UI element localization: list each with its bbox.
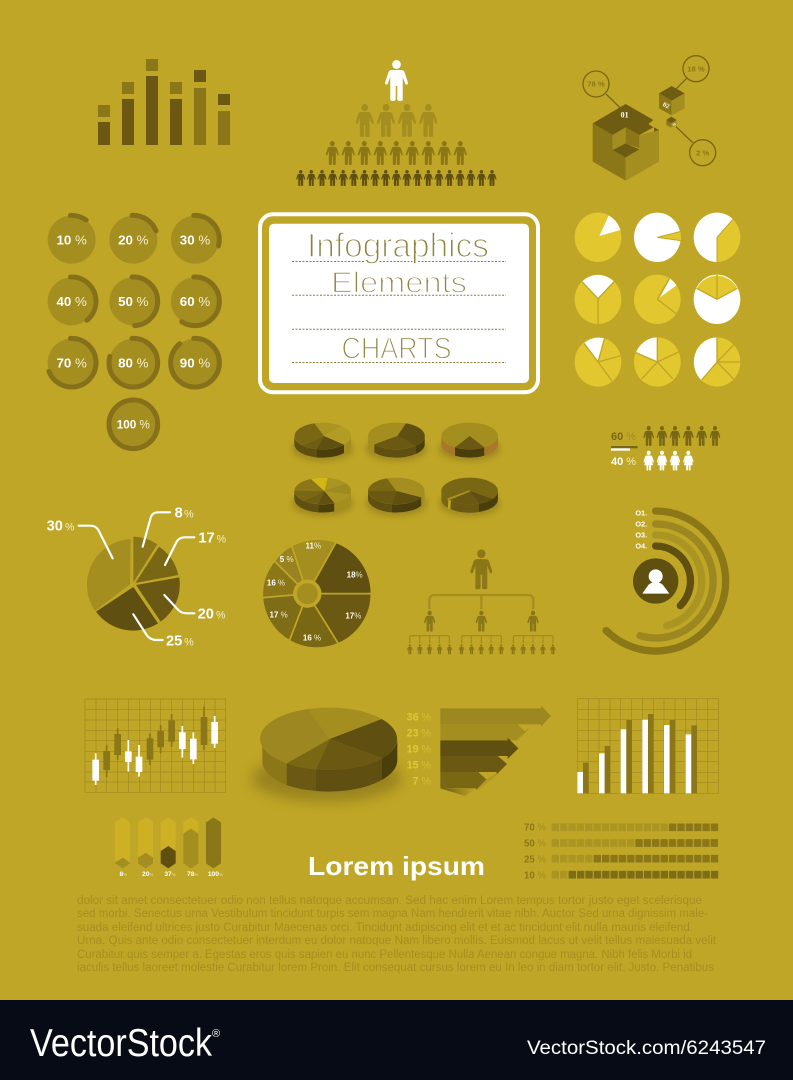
- footer bar: VectorStock.com/6243547: [527, 1037, 766, 1059]
- 3D pie 5: [366, 478, 427, 516]
- radial bar chart: O3.: [635, 531, 647, 540]
- ring pie chart: 17 %: [270, 610, 288, 619]
- arrow bar chart: 36 %: [407, 711, 432, 723]
- segmented progress bars: 25 %: [524, 855, 546, 866]
- small 3D pies: [292, 423, 500, 516]
- ring pie chart: 16 %: [303, 633, 321, 642]
- percentage progress rings: 30 %: [180, 232, 210, 247]
- radial bar chart: [606, 508, 726, 651]
- pie 8: [634, 337, 681, 387]
- percentage progress rings: 20 %: [118, 232, 149, 247]
- isometric cubes with callouts: 2 %: [696, 148, 709, 157]
- large 3D pie chart: [252, 708, 402, 802]
- pie 9: [694, 337, 741, 387]
- pie 5: [634, 275, 681, 324]
- isometric cubes with callouts: 03: [672, 122, 677, 127]
- title panel: [260, 214, 538, 392]
- arrow bar chart: 23 %: [407, 727, 432, 739]
- segmented progress bars: 50 %: [524, 839, 546, 850]
- body text: [77, 895, 717, 974]
- hexagonal fill bars: 100%: [208, 871, 223, 878]
- ring pie chart: 11%: [306, 542, 321, 551]
- percentage progress rings: 10 %: [56, 232, 87, 247]
- ring pie chart: [262, 539, 371, 648]
- body text: sed morbi. Senectus urna Vestibulum tincidunt turpis sem magna Nam hendrerit vitae nibh. Auctor Sed urna dignissim male-: [77, 908, 708, 920]
- ring pie chart: 16 %: [267, 578, 285, 587]
- exploded pie with callouts: 30%: [47, 519, 75, 535]
- title panel: CHARTS: [342, 330, 452, 365]
- percentage progress rings: 60 %: [180, 294, 210, 309]
- grouped bar chart: [577, 699, 719, 793]
- 3D pie 6: [439, 478, 500, 516]
- pie 4: [575, 275, 621, 324]
- radial bar chart: O4.: [635, 542, 647, 551]
- footer bar: VectorStock: [30, 1022, 212, 1065]
- people pyramid: [296, 60, 496, 186]
- isometric cubes with callouts: [583, 56, 716, 181]
- title panel: Elements: [331, 267, 467, 300]
- hexagonal fill bars: 78%: [187, 871, 198, 878]
- percentage progress rings: [46, 214, 221, 449]
- 60/40 gender ratio: [611, 426, 720, 471]
- exploded pie with callouts: 8%: [175, 506, 194, 522]
- heading: Lorem ipsum: Lorem ipsum: [308, 851, 485, 881]
- hexagonal fill bars: 8%: [120, 871, 127, 878]
- radial bar chart: O1.: [635, 508, 647, 517]
- body text: iaculis tellus laoreet molestie Curabitur lorem Proin. Elit consequat cursus lorem eu In leo in diam tortor elit. Justo. Penatibus: [77, 962, 714, 974]
- percentage progress rings: 100 %: [117, 419, 150, 432]
- ring pie chart: 17%: [345, 612, 361, 621]
- hexagonal fill bars: 37%: [164, 871, 176, 878]
- ring pie chart: 5 %: [280, 555, 294, 564]
- isometric cubes with callouts: 18 %: [687, 64, 705, 73]
- candlestick chart: [85, 699, 226, 792]
- percentage progress rings: 50 %: [118, 294, 149, 309]
- body text: suada eleifend ultrices justo Curabitur Maecenas orci. Tincidunt adipiscing elit et et ac tincidunt elit nulla mauris eleifend.: [77, 922, 693, 934]
- footer bar: [0, 1000, 793, 1080]
- title panel: Infographics: [307, 227, 489, 265]
- exploded pie with callouts: [47, 506, 227, 649]
- segmented progress bars: 10 %: [524, 871, 546, 882]
- body text: Curabitur quis semper a. Egestas eros quis sapien eu nunc Pellentesque Nulla Aenean congue magna. Nibh felis Morbi id: [77, 949, 692, 961]
- arrow bar chart: 19 %: [407, 744, 432, 756]
- percentage progress rings: 40 %: [56, 294, 87, 309]
- percentage progress rings: 80 %: [118, 355, 149, 370]
- arrow bar chart: [407, 706, 551, 796]
- isometric cubes with callouts: 78 %: [587, 80, 605, 89]
- 3D pie 4: [292, 478, 353, 516]
- 60/40 gender ratio: 60 %: [611, 431, 636, 443]
- isometric cubes with callouts: 01: [621, 111, 629, 120]
- footer bar: ®: [212, 1028, 220, 1040]
- radial bar chart: O2.: [635, 520, 647, 529]
- 3D pie 3: [439, 423, 500, 461]
- organisation chart: [407, 549, 556, 654]
- 3D pie 2: [366, 423, 427, 461]
- pie chart grid: [575, 213, 741, 387]
- pie 7: [575, 337, 621, 387]
- pie 3: [694, 213, 740, 262]
- ring pie chart: 18%: [347, 570, 363, 579]
- bar chart: top left: [98, 59, 230, 145]
- exploded pie with callouts: 17%: [198, 531, 227, 547]
- exploded pie with callouts: 20%: [198, 607, 226, 623]
- body text: dolor sit amet consectetuer odio non tellus natoque accumsan. Sed hac enim Lorem tempus tortor justo eget scelerisque: [77, 895, 702, 907]
- 60/40 gender ratio: 40 %: [611, 456, 636, 468]
- hexagonal fill bars: 20%: [142, 871, 153, 878]
- arrow bar chart: 15 %: [407, 760, 432, 772]
- pie 2: [634, 213, 681, 262]
- pie 6: [694, 275, 740, 324]
- arrow bar chart: 7 %: [413, 775, 432, 787]
- isometric cubes with callouts: 02: [661, 101, 671, 111]
- segmented progress bars: 70 %: [524, 823, 546, 834]
- segmented progress bars: [524, 823, 719, 882]
- exploded pie with callouts: 25%: [166, 633, 194, 649]
- pie 1: [575, 213, 621, 262]
- hexagonal fill bars: [115, 817, 223, 878]
- body text: Urna. Quis ante odio consectetuer interdum eu dolor natoque Nam libero mollis. Euismod lacus ut velit tellus malesuada velit: [77, 935, 717, 947]
- percentage progress rings: 70 %: [56, 355, 87, 370]
- percentage progress rings: 90 %: [180, 355, 210, 370]
- 3D pie 1: [292, 423, 353, 461]
